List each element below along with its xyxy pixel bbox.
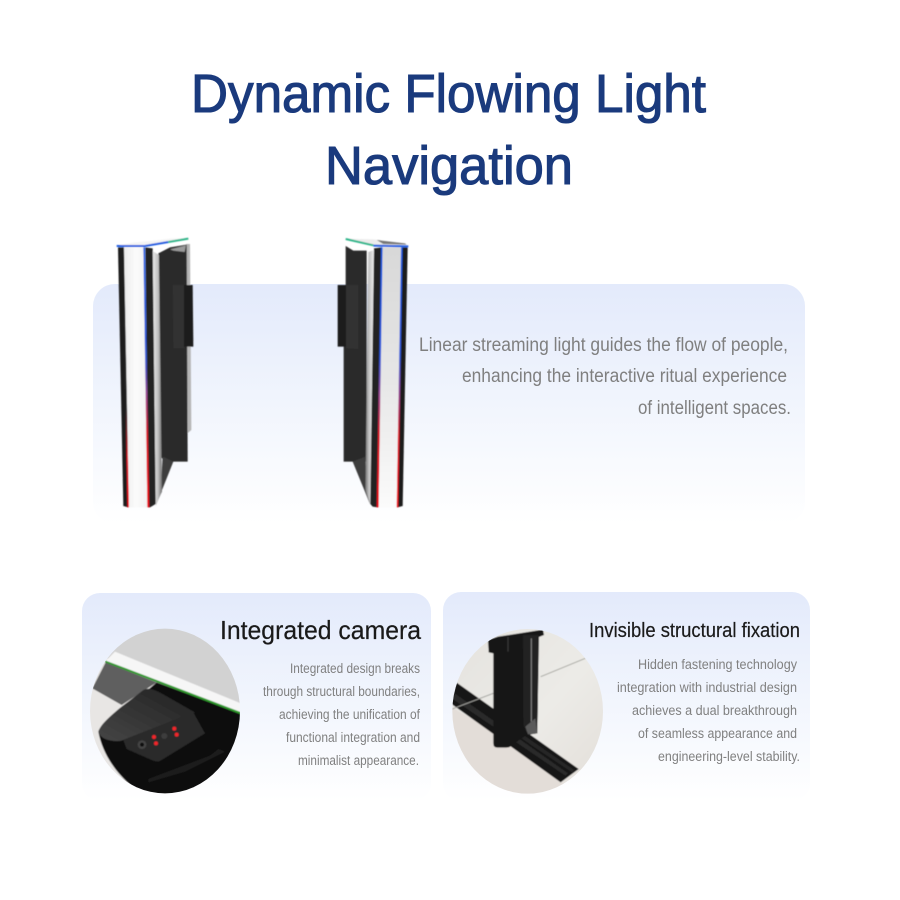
text: integrated camera description: minimalist appearance. — [298, 753, 419, 768]
text: fixation description: integration with industrial design — [617, 680, 797, 695]
panel: flowing light navigation — [93, 284, 805, 524]
text: fixation description: achieves a dual breakthrough — [632, 703, 797, 718]
text: fixation description — [617, 657, 800, 764]
text: integrated camera description: achieving the unification of — [279, 707, 420, 722]
panel: invisible structural fixation — [443, 592, 810, 801]
image: right gate pillar — [338, 239, 408, 507]
text: integrated camera description: Integrated design breaks — [290, 661, 420, 676]
text: navigation description: Linear streaming light guides the flow of people, — [419, 335, 788, 356]
image: camera close-up — [90, 628, 240, 794]
text: integrated camera description — [263, 661, 420, 768]
title — [191, 64, 706, 196]
text: fixation description: engineering-level stability. — [658, 749, 800, 764]
text: navigation description: of intelligent spaces. — [638, 398, 791, 419]
text: integrated camera description: functional integration and — [286, 730, 420, 745]
text: navigation description: enhancing the interactive ritual experience — [462, 366, 787, 387]
text: navigation description — [419, 335, 791, 419]
heading: invisible structural fixation: Invisible structural fixation — [589, 620, 800, 642]
heading: integrated camera: Integrated camera — [220, 615, 422, 645]
text: fixation description: of seamless appearance and — [638, 726, 797, 741]
title: Navigation — [325, 136, 573, 196]
image: fixation close-up — [452, 629, 603, 794]
text: fixation description: Hidden fastening technology — [638, 657, 797, 672]
image: left gate pillar — [117, 238, 193, 507]
title: Dynamic Flowing Light — [191, 64, 706, 124]
text: integrated camera description: through structural boundaries, — [263, 684, 420, 699]
panel: integrated camera — [82, 593, 431, 801]
